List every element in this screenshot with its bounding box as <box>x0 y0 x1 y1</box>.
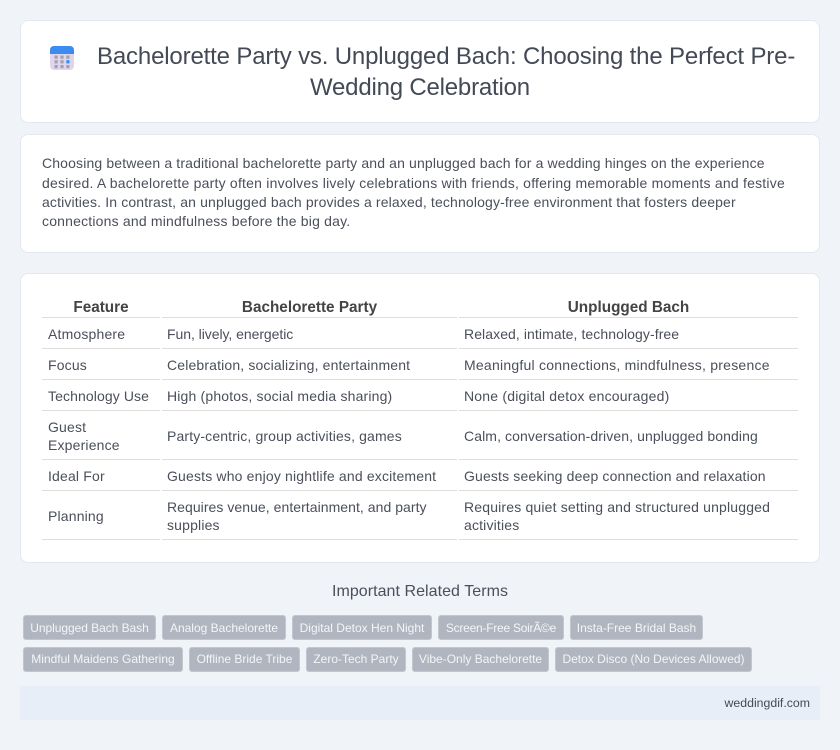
footer source: weddingdif.com <box>725 696 810 710</box>
table row: Guest Experience <box>48 419 758 453</box>
table row: Focus <box>48 357 770 373</box>
tag <box>23 615 156 640</box>
tag: Unplugged Bach Bash <box>30 621 149 635</box>
footer bar <box>20 686 820 720</box>
tag <box>23 647 183 672</box>
table row: Atmosphere: Relaxed, intimate, technology-free <box>464 326 679 342</box>
tag: Mindful Maidens Gathering <box>31 652 175 666</box>
table row: Ideal For: Ideal For <box>48 468 105 484</box>
table row: Technology Use <box>48 388 669 404</box>
table row: Focus: Focus <box>48 357 87 373</box>
table row: Ideal For: Guests who enjoy nightlife and excitement <box>167 468 436 484</box>
panel: title header <box>20 20 820 123</box>
table header: Unplugged Bach: Unplugged Bach <box>568 299 689 316</box>
tag: Analog Bachelorette <box>170 621 278 635</box>
tag: Offline Bride Tribe <box>197 652 292 666</box>
title: Wedding Celebration <box>310 74 530 101</box>
table row: Technology Use: High (photos, social media sharing) <box>167 388 392 404</box>
tag <box>555 647 752 672</box>
panel: comparison table <box>20 273 820 563</box>
table row: Planning: Requires venue, entertainment, and party <box>167 499 427 515</box>
tag <box>292 615 432 640</box>
tag <box>438 615 564 640</box>
icon: calendar <box>50 46 74 70</box>
tag <box>306 647 406 672</box>
table row: Focus: Meaningful connections, mindfulness, presence <box>464 357 770 373</box>
intro paragraph: Choosing between a traditional bachelorette party and an unplugged bach for a wedding hinges on the experience <box>42 155 765 171</box>
tag <box>570 615 703 640</box>
table row: Planning: Planning <box>48 508 104 524</box>
table row: Planning: Requires quiet setting and structured unplugged <box>464 499 770 515</box>
table row: Atmosphere: Atmosphere <box>48 326 125 342</box>
table header: Feature: Feature <box>73 299 129 316</box>
table row: Technology Use: None (digital detox encouraged) <box>464 388 669 404</box>
intro paragraph <box>42 155 785 229</box>
table row: Atmosphere: Fun, lively, energetic <box>167 326 293 342</box>
tag: Digital Detox Hen Night <box>300 621 424 635</box>
table row: Planning: supplies <box>167 517 220 533</box>
heading: related terms: Important Related Terms <box>332 583 508 600</box>
table row: Guest Experience: Party-centric, group activities, games <box>167 428 402 444</box>
table row: Planning: activities <box>464 517 519 533</box>
table row: Ideal For <box>48 468 766 484</box>
tag: Vibe-Only Bachelorette <box>419 652 542 666</box>
table row: Guest Experience: Guest <box>48 419 86 435</box>
tag: Screen-Free SoirÃ©e <box>446 621 556 635</box>
tag <box>162 615 286 640</box>
tag: Detox Disco (No Devices Allowed) <box>562 652 745 666</box>
intro paragraph: connections and mindfulness before the big day. <box>42 213 350 229</box>
table row: Atmosphere <box>48 326 679 342</box>
panel: introduction <box>20 134 820 253</box>
table row: Technology Use: Technology Use <box>48 388 149 404</box>
title <box>97 43 795 101</box>
tag <box>412 647 549 672</box>
title: Bachelorette Party vs. Unplugged Bach: Choosing the Perfect Pre- <box>97 43 795 70</box>
tag: Zero-Tech Party <box>313 652 399 666</box>
table rules <box>42 317 798 540</box>
table row: Ideal For: Guests seeking deep connection and relaxation <box>464 468 766 484</box>
intro paragraph: desired. A bachelorette party often involves lively celebrations with friends, offering memorable moments and festive <box>42 175 785 191</box>
related term tags <box>23 615 752 672</box>
table row: Planning <box>48 499 770 533</box>
table row: Guest Experience: Experience <box>48 437 120 453</box>
intro paragraph: activities. In contrast, an unplugged bach provides a relaxed, technology-free environment that fosters deeper <box>42 194 736 210</box>
table row: Focus: Celebration, socializing, entertainment <box>167 357 410 373</box>
tag: Insta-Free Bridal Bash <box>577 621 696 635</box>
table header: Bachelorette Party: Bachelorette Party <box>242 299 377 316</box>
tag <box>189 647 300 672</box>
table row: Guest Experience: Calm, conversation-driven, unplugged bonding <box>464 428 758 444</box>
